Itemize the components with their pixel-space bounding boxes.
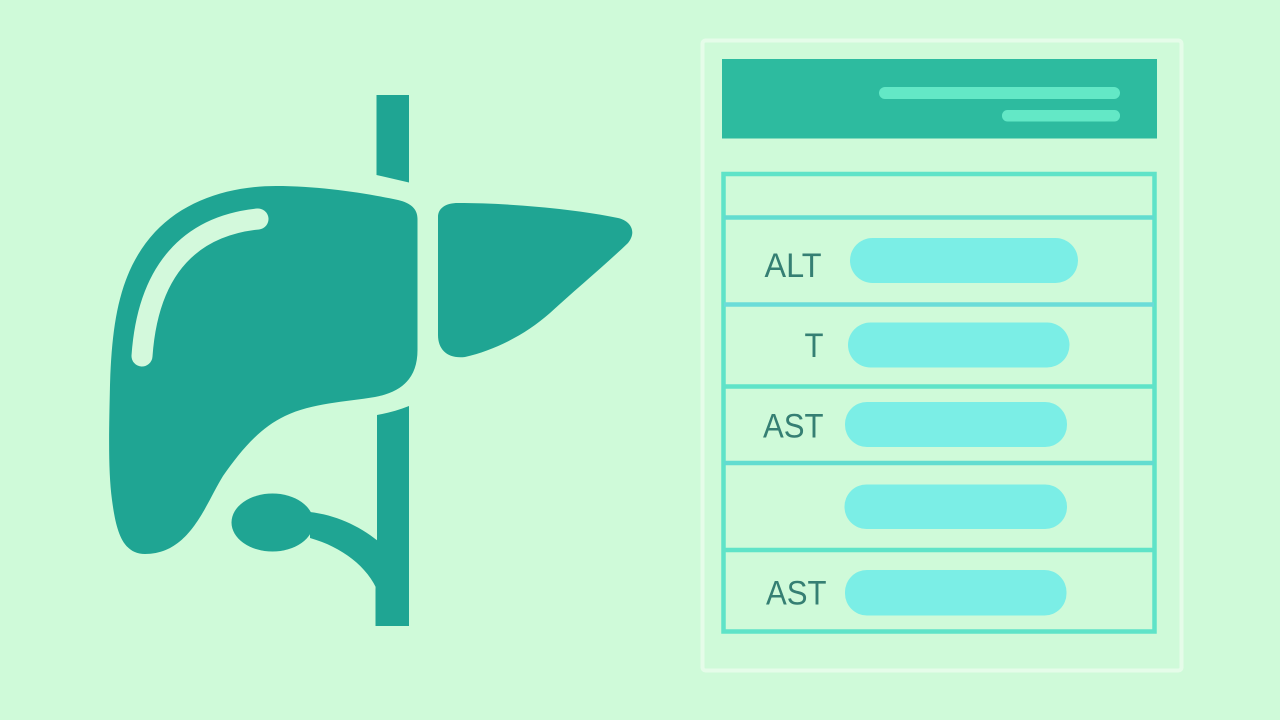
AST value bar (845, 402, 1067, 447)
table row: T (804, 322, 1070, 368)
T value bar (848, 322, 1070, 368)
highlight on left lobe (142, 219, 258, 356)
gallbladder (232, 494, 314, 552)
report outer frame (702, 40, 1182, 670)
header subtitle placeholder (1002, 110, 1120, 122)
table row: blank value bar (844, 484, 1067, 529)
header title placeholder (879, 87, 1120, 99)
report header band (722, 59, 1157, 138)
table row: ALT (764, 238, 1078, 285)
gallbladder duct (310, 512, 378, 592)
table row: AST second: AST (766, 574, 826, 612)
upper vessel (376, 95, 409, 182)
left liver lobe (109, 186, 417, 554)
table row: AST: AST (763, 408, 824, 446)
icon: liver with vessel and gallbladder (109, 95, 632, 626)
table row: AST second (766, 570, 1066, 616)
ALT value bar (850, 238, 1078, 283)
table row: T: T (804, 327, 824, 365)
table row: ALT: ALT (764, 247, 822, 285)
lower vessel with duct junction (376, 406, 409, 626)
panel: lab report (702, 40, 1182, 670)
table row: AST (763, 402, 1067, 447)
second AST value bar (845, 570, 1066, 616)
results table grid (724, 174, 1154, 632)
right liver lobe (438, 203, 632, 357)
